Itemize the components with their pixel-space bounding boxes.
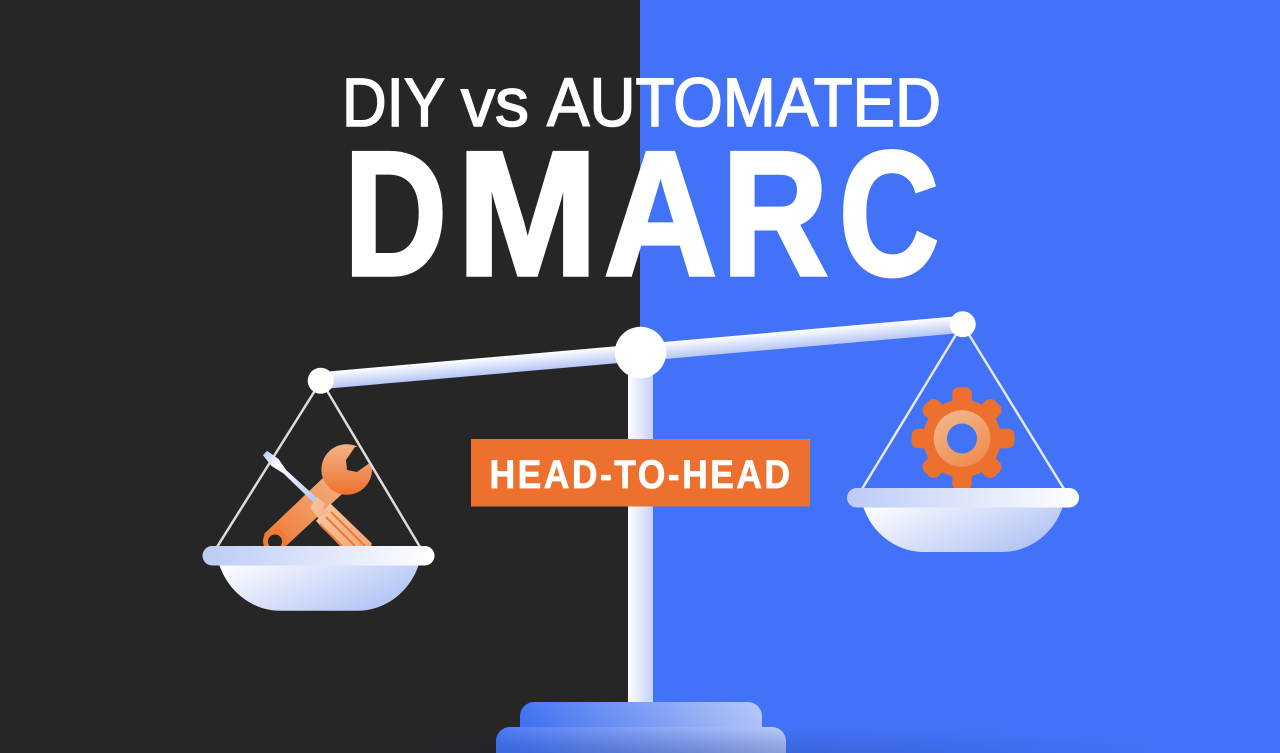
badge: HEAD-TO-HEAD <box>471 439 810 506</box>
badge: HEAD-TO-HEAD: HEAD-TO-HEAD <box>490 452 790 496</box>
icon: gear <box>912 387 1014 490</box>
icon: wrench <box>263 444 376 553</box>
left pan strings <box>217 389 420 547</box>
scale pole <box>628 370 653 705</box>
ground shadow <box>200 703 1160 753</box>
right pan with gear <box>847 311 1079 552</box>
scale beam <box>320 316 964 389</box>
title: DIY vs AUTOMATED: AUTOMATED <box>547 64 941 141</box>
title: DMARC: C <box>839 115 939 313</box>
right pivot <box>950 311 976 337</box>
left pan with tools <box>202 368 434 611</box>
background: blue right half <box>640 0 1280 753</box>
title: DIY vs AUTOMATED: vs <box>461 64 529 141</box>
right bowl <box>863 506 1063 552</box>
left pivot <box>308 368 334 394</box>
right pan strings <box>862 333 1064 489</box>
title: DMARC: R <box>722 115 828 313</box>
title: DMARC: A <box>604 115 717 313</box>
title: DMARC: D <box>344 115 447 313</box>
title: DIY vs AUTOMATED: DIY <box>342 64 444 141</box>
right rim <box>847 488 1079 508</box>
background: dark left half <box>0 0 640 753</box>
scale pivot <box>615 327 666 378</box>
left rim <box>202 546 434 566</box>
title: DMARC: M <box>457 115 598 313</box>
scale base <box>496 702 786 753</box>
left bowl <box>219 564 419 611</box>
icon: screwdriver <box>263 451 372 548</box>
